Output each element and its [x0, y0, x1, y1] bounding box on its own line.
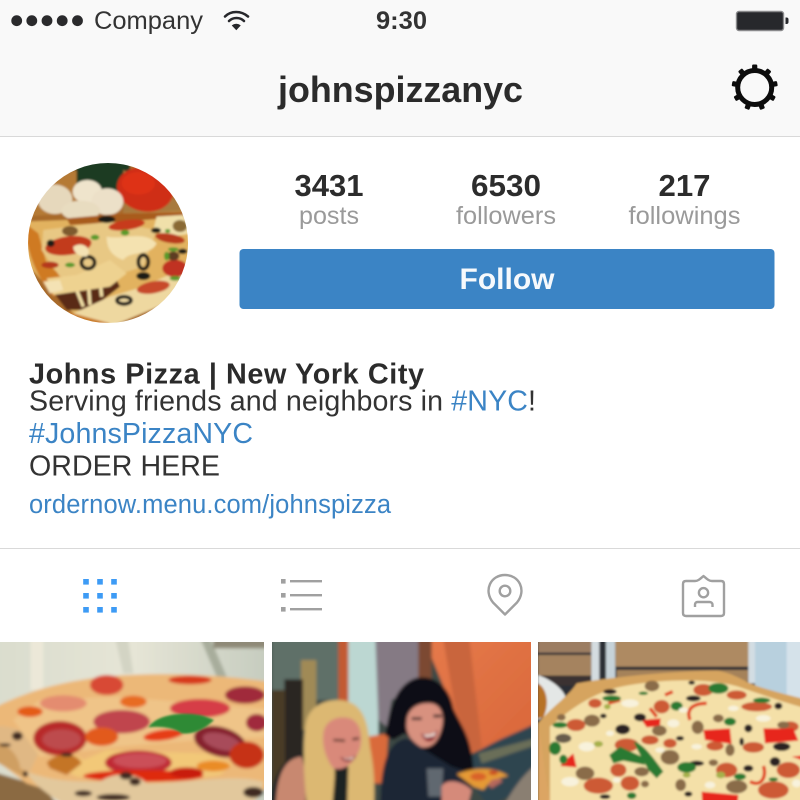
icon: grid tab — [83, 579, 117, 613]
bio link: ordernow.menu.com/johnspizza — [29, 491, 392, 519]
stat: followings: 217 — [658, 168, 710, 203]
icon: list tab — [281, 579, 322, 612]
stat: posts: posts — [299, 202, 359, 230]
username heading: johnspizzanyc — [277, 69, 523, 110]
photo: pepperoni pizza — [0, 642, 264, 800]
stat: followers: 6530 — [471, 168, 541, 203]
stat: posts — [294, 168, 364, 230]
follow button — [240, 249, 774, 309]
photo: two women eating pizza — [272, 642, 531, 800]
stat: followers: followers — [456, 202, 556, 230]
icon: wifi — [225, 12, 248, 30]
bio name: Johns Pizza | New York City — [29, 358, 424, 390]
bio hashtag: #JohnsPizzaNYC — [29, 418, 253, 450]
clock: 9:30 — [376, 7, 427, 35]
carrier name: Company — [94, 7, 204, 35]
icon: battery — [736, 12, 788, 30]
icon: settings gear — [732, 64, 778, 110]
icon: location tab — [489, 575, 521, 614]
bio line one: Serving friends and neighbors in #NYC! — [29, 386, 536, 418]
bio text block — [29, 358, 536, 519]
navigation header — [0, 0, 800, 137]
stat: followers — [456, 168, 556, 230]
bio order here: ORDER HERE — [29, 450, 220, 482]
follow button: Follow — [460, 263, 555, 296]
stat: followings — [628, 168, 740, 230]
icon: tagged tab — [683, 576, 724, 616]
avatar: pizza photo — [28, 163, 188, 323]
stat: followings: followings — [628, 202, 740, 230]
stat: posts: 3431 — [294, 168, 364, 203]
photo: loaded pizza — [538, 642, 800, 800]
icon: signal dots — [11, 15, 83, 26]
